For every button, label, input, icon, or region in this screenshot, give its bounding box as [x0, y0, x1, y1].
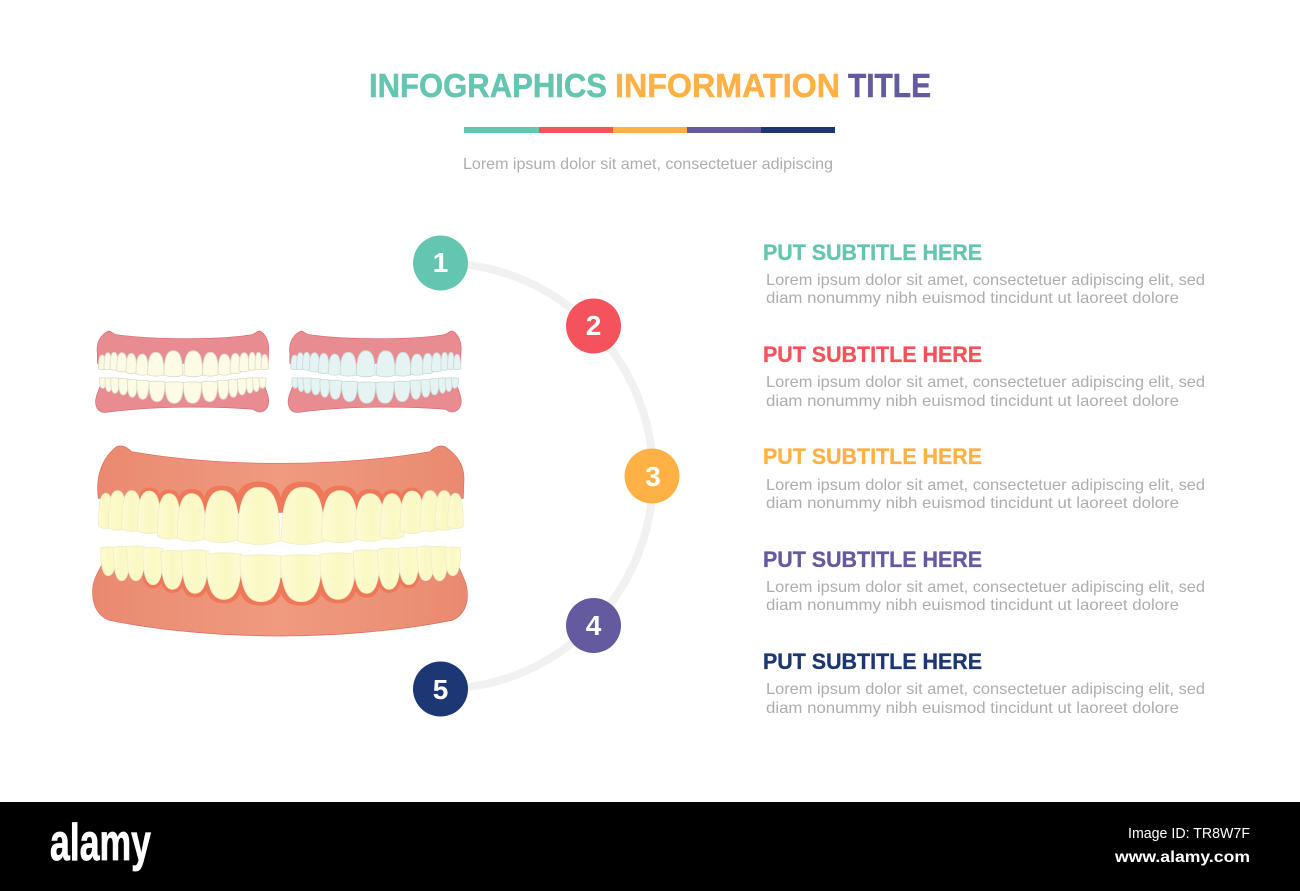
footer bar	[0, 802, 1300, 891]
website: www.alamy.com	[1114, 849, 1250, 866]
title description: Lorem ipsum dolor sit amet, consectetuer adipiscing	[463, 156, 833, 173]
text block 4	[763, 547, 1205, 614]
gum halos	[137, 482, 425, 606]
illustration: large teeth	[93, 446, 467, 636]
text block 5: PUT SUBTITLE HERE	[763, 649, 982, 674]
step marker 5	[413, 662, 468, 716]
step marker 3	[624, 448, 680, 504]
step marker 2: 2	[586, 310, 601, 341]
text block 5: diam nonummy nibh euismod tincidunt ut laoreet dolore	[766, 700, 1179, 717]
step marker 5: 5	[433, 674, 448, 705]
text block 5	[763, 649, 1205, 717]
lower gum	[93, 565, 467, 636]
text block 1: PUT SUBTITLE HERE	[763, 240, 982, 265]
colour bar under title	[464, 127, 835, 133]
text block 2	[763, 342, 1205, 410]
text block 4: PUT SUBTITLE HERE	[763, 547, 982, 572]
step marker 1: 1	[433, 247, 448, 278]
title: INFORMATION	[615, 67, 840, 104]
title: INFOGRAPHICS	[369, 67, 607, 104]
text block 3: Lorem ipsum dolor sit amet, consectetuer adipiscing elit, sed	[766, 477, 1205, 494]
image id: Image ID: TR8W7F	[1128, 825, 1250, 842]
text block 1	[763, 240, 1205, 307]
text block 1: Lorem ipsum dolor sit amet, consectetuer adipiscing elit, sed	[766, 272, 1205, 289]
text block 3: PUT SUBTITLE HERE	[763, 444, 982, 469]
text block 5: Lorem ipsum dolor sit amet, consectetuer adipiscing elit, sed	[766, 681, 1205, 698]
step marker 4: 4	[586, 610, 602, 641]
step marker 3: 3	[645, 461, 661, 492]
upper gum	[98, 446, 464, 512]
text block 4: diam nonummy nibh euismod tincidunt ut laoreet dolore	[766, 597, 1179, 614]
title	[369, 67, 931, 104]
teeth	[98, 487, 463, 602]
step marker 1	[413, 236, 468, 290]
text block 4: Lorem ipsum dolor sit amet, consectetuer adipiscing elit, sed	[766, 579, 1205, 596]
title: TITLE	[848, 67, 931, 104]
text block 3	[763, 444, 1205, 512]
text block 2: Lorem ipsum dolor sit amet, consectetuer adipiscing elit, sed	[766, 374, 1205, 391]
text block 1: diam nonummy nibh euismod tincidunt ut laoreet dolore	[766, 290, 1179, 307]
connector arc	[440, 263, 653, 689]
text block 2: PUT SUBTITLE HERE	[763, 342, 982, 367]
illustration: small yellow teeth	[96, 331, 269, 413]
illustration: small white teeth	[288, 331, 461, 413]
footer logo: alamy	[50, 814, 151, 872]
step marker 4	[566, 598, 621, 653]
text block 3: diam nonummy nibh euismod tincidunt ut laoreet dolore	[766, 495, 1179, 512]
text block 2: diam nonummy nibh euismod tincidunt ut laoreet dolore	[766, 393, 1179, 410]
step marker 2	[566, 298, 621, 354]
